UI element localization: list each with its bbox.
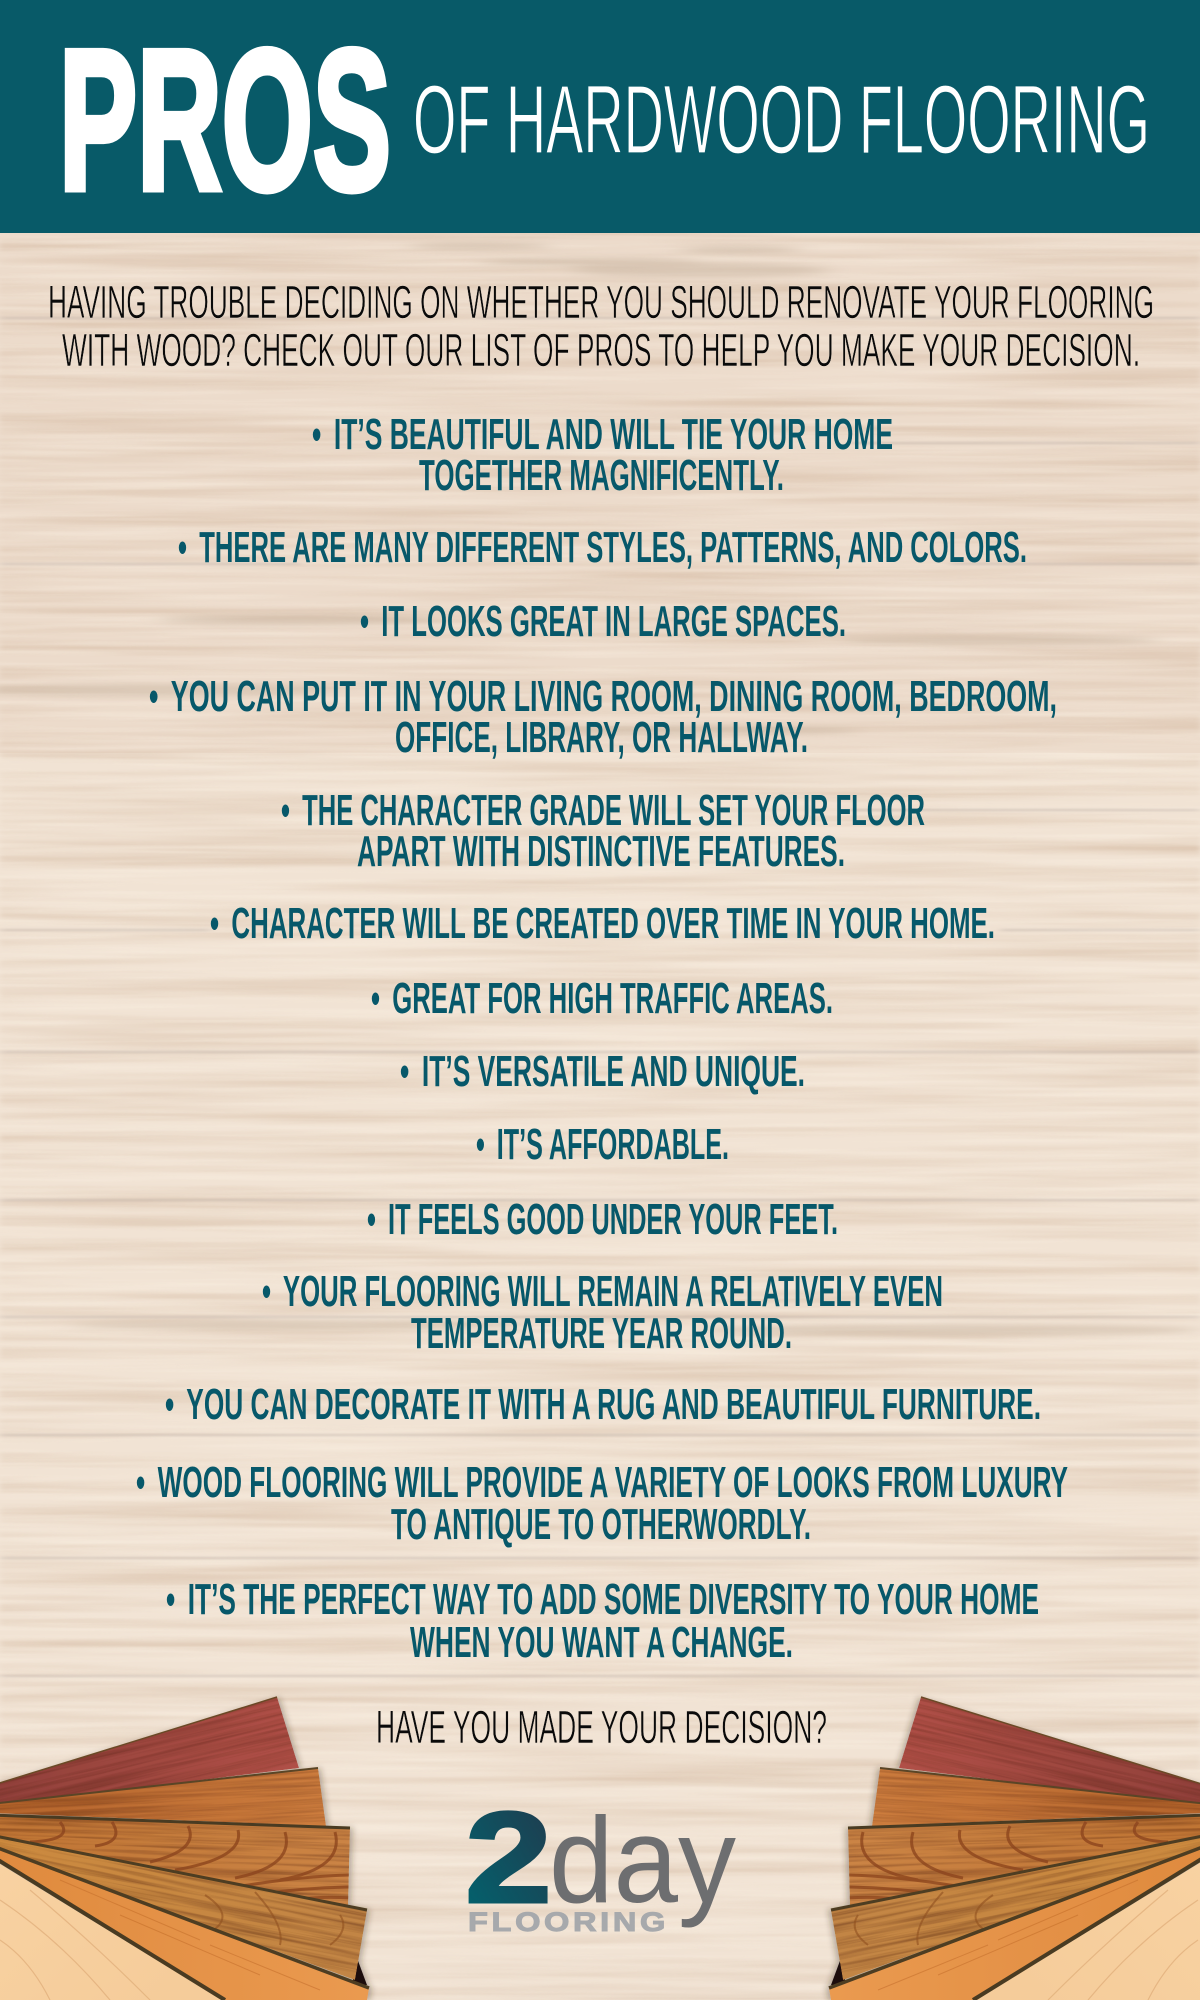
plank: dark black gap xyxy=(352,1958,367,1985)
list of pros xyxy=(136,410,1068,1667)
logo numeral 2: 2 xyxy=(465,1786,552,1930)
title xyxy=(59,9,1150,232)
pro 11: TEMPERATURE YEAR ROUND. xyxy=(411,1309,792,1358)
plank: cherry xyxy=(0,1731,363,1872)
right wood plank fan xyxy=(803,1626,1200,2000)
pro 14: WHEN YOU WANT A CHANGE. xyxy=(410,1618,793,1667)
pro 1 xyxy=(312,410,893,500)
pro 13: TO ANTIQUE TO OTHERWORDLY. xyxy=(391,1500,811,1549)
logo word day: day xyxy=(549,1792,736,1928)
pro 1: TOGETHER MAGNIFICENTLY. xyxy=(419,451,784,500)
pro 5 xyxy=(281,786,925,876)
plank: mahogany xyxy=(0,1626,340,1838)
logo word flooring: FLOORING xyxy=(468,1907,669,1937)
pro 8: • IT’S VERSATILE AND UNIQUE. xyxy=(400,1047,805,1096)
pro 5: APART WITH DISTINCTIVE FEATURES. xyxy=(357,827,845,876)
header banner xyxy=(0,0,1200,233)
left wood plank fan xyxy=(0,1626,395,2000)
pro 4: OFFICE, LIBRARY, OR HALLWAY. xyxy=(395,713,808,762)
plank: pale birch xyxy=(0,1858,222,2000)
pro 11 xyxy=(262,1267,943,1358)
pro 14 xyxy=(166,1575,1039,1667)
plank: orange maple xyxy=(0,1845,369,2000)
pro 3: • IT LOOKS GREAT IN LARGE SPACES. xyxy=(360,597,846,646)
title word: PROS: PROS xyxy=(59,9,391,232)
pro 10: • IT FEELS GOOD UNDER YOUR FEET. xyxy=(367,1195,838,1244)
pro 9: • IT’S AFFORDABLE. xyxy=(476,1120,729,1169)
pro 7: • GREAT FOR HIGH TRAFFIC AREAS. xyxy=(371,974,833,1023)
closing question: HAVE YOU MADE YOUR DECISION? xyxy=(376,1701,827,1753)
pro 13 xyxy=(136,1458,1068,1549)
intro paragraph xyxy=(48,276,1154,376)
logo: 2day Flooring xyxy=(465,1786,736,1937)
plank: oak with cathedral grain xyxy=(0,1789,381,1933)
plank: golden oak xyxy=(0,1826,395,1990)
pro 4 xyxy=(149,672,1057,762)
